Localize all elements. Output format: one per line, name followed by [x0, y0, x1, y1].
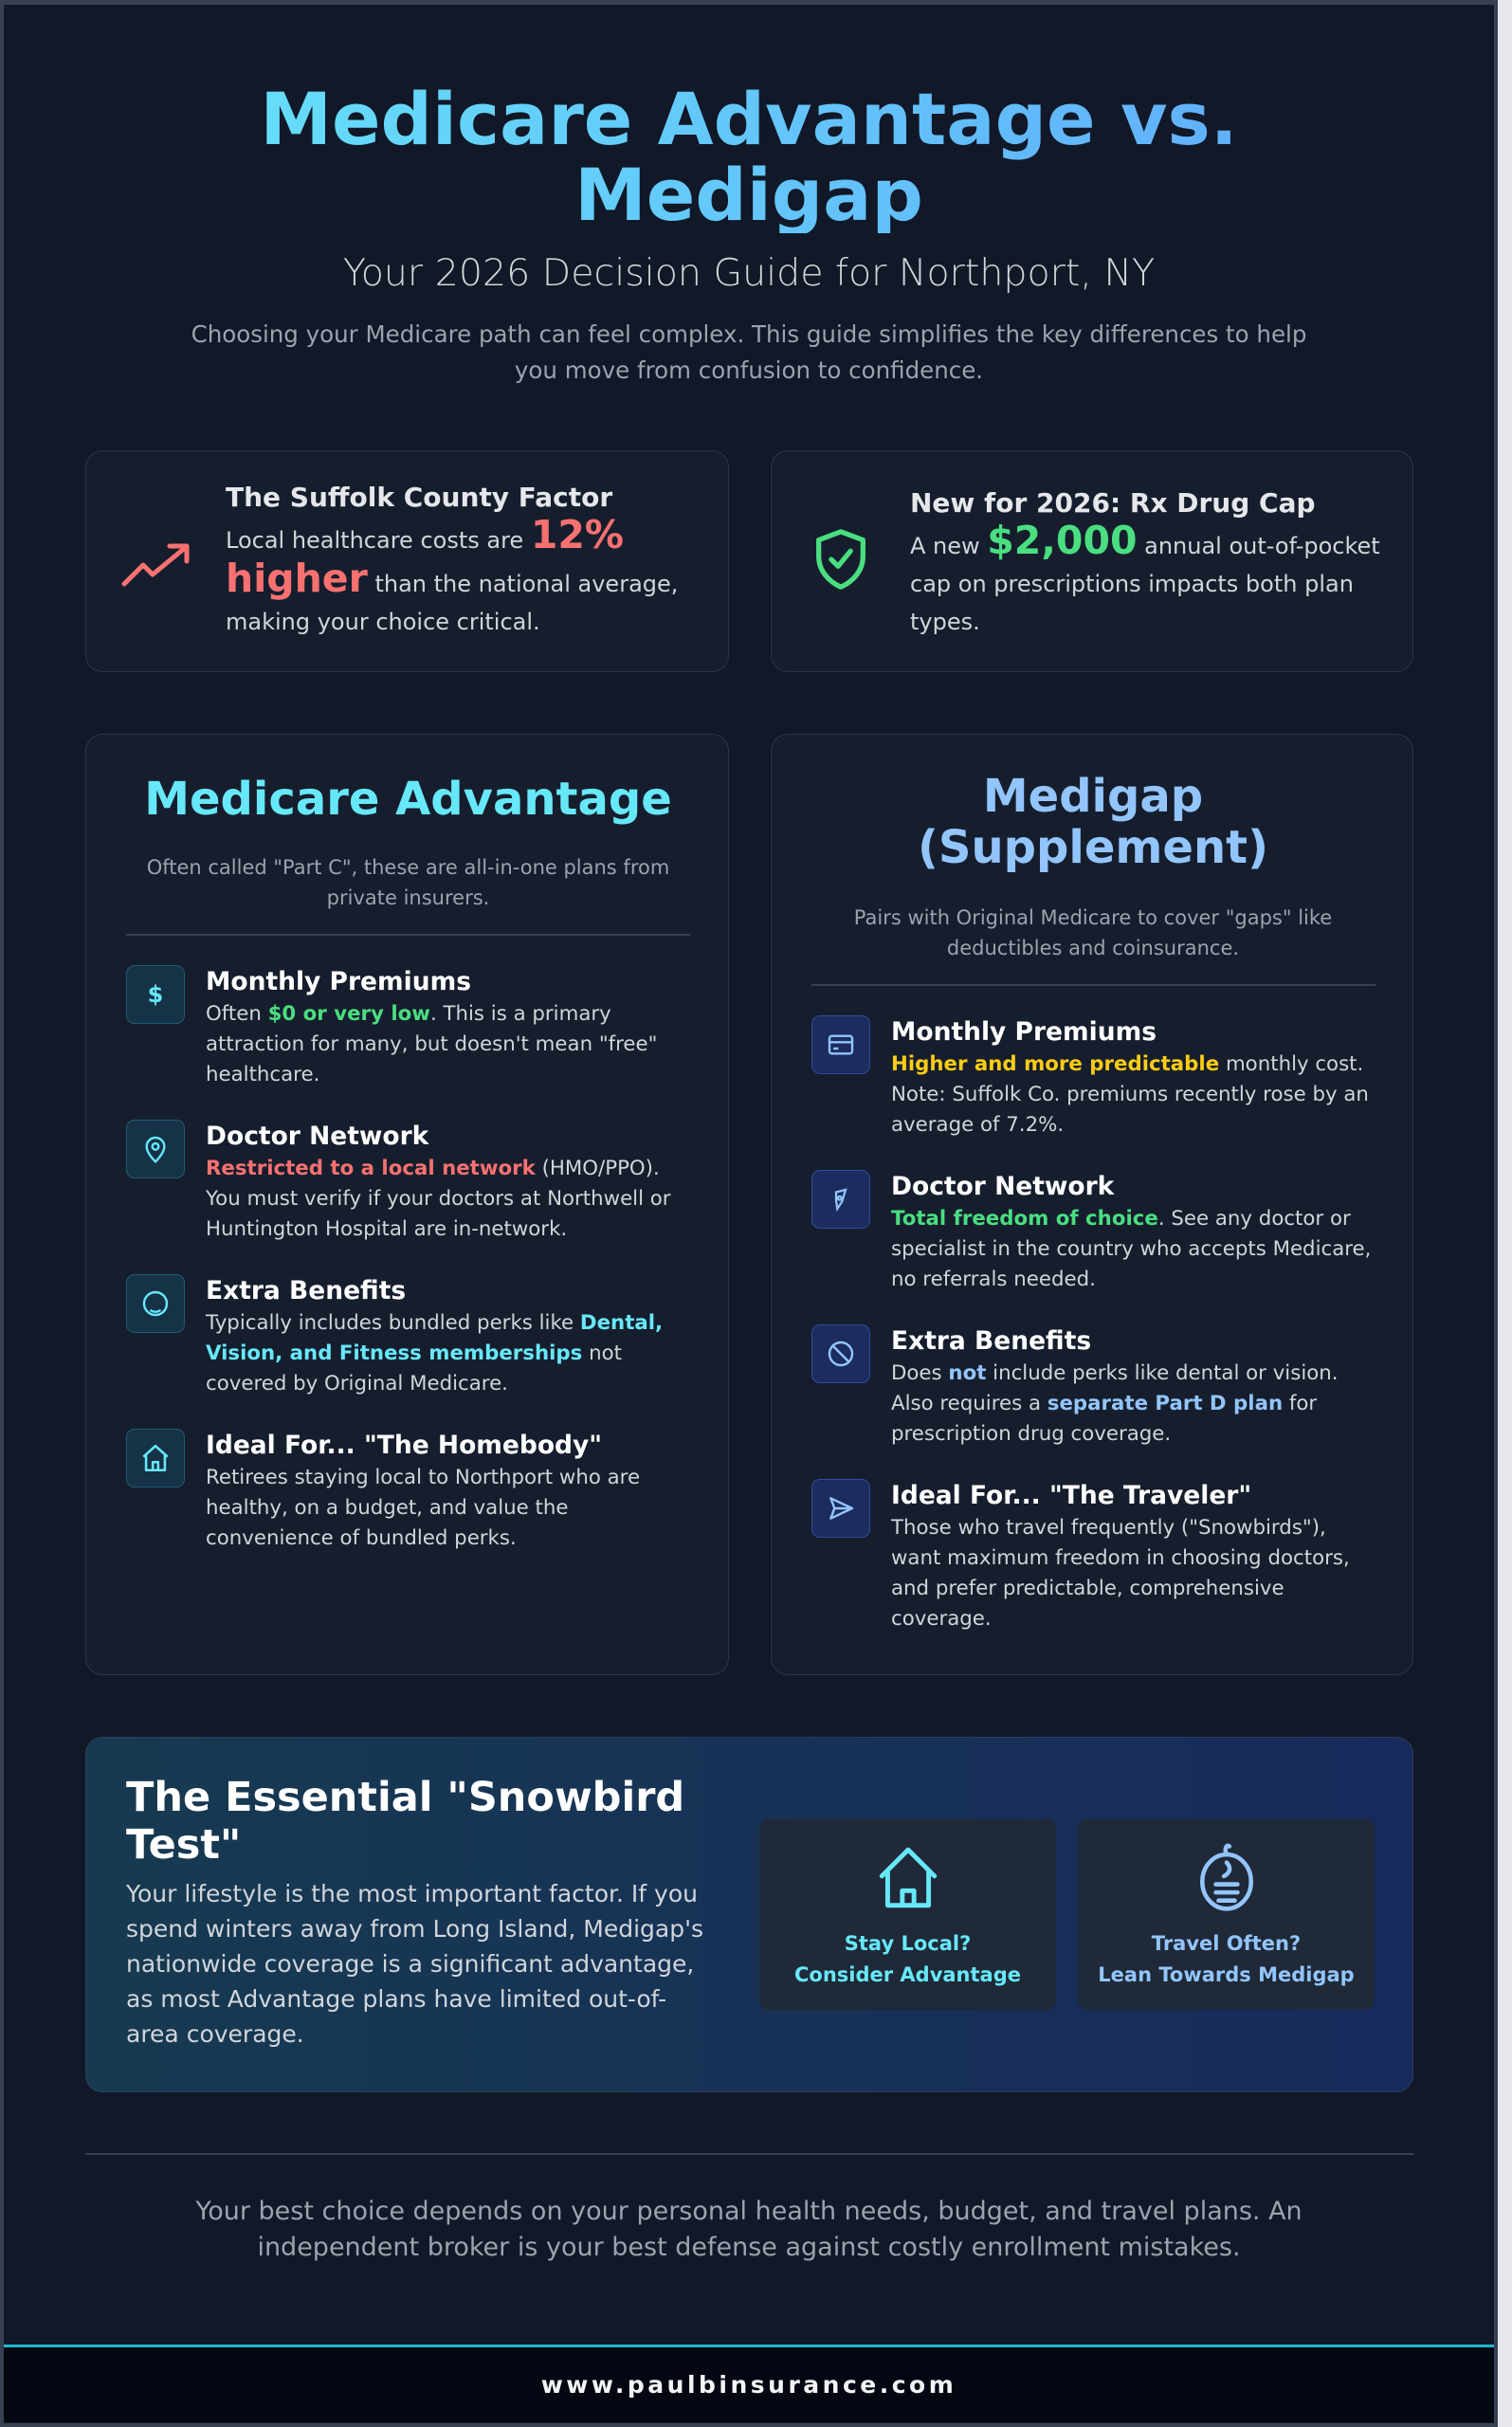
option card: stay local: Stay Local?: [845, 1932, 971, 1955]
item: ideal for homebody: [126, 1429, 640, 1550]
option card: travel often: [1078, 1819, 1375, 2010]
item: extra benefits: Typically includes bundled perks like Dental, Vision, and Fitness memberships not covered by Original Medicare.: [206, 1311, 663, 1396]
footer: [4, 2345, 1494, 2422]
icon: trend up: [121, 544, 190, 586]
snowbird heading: The Essential "Snowbird Test": [126, 1774, 684, 1869]
title: [0, 82, 1498, 233]
option card: stay local: Consider Advantage: [794, 1963, 1021, 1986]
item: monthly premiums: Monthly Premiums: [891, 1017, 1157, 1047]
panel heading: [918, 770, 1268, 874]
icon: shield check: [816, 529, 865, 590]
item: doctor network: [126, 1120, 671, 1241]
item: doctor network: [811, 1170, 1371, 1291]
panel description: Often called "Part C", these are all-in-one plans from private insurers.: [147, 856, 669, 909]
item: ideal for homebody: Retirees staying local to Northport who are healthy, on a budget, and value the convenience of bundled perks.: [206, 1466, 640, 1550]
panel description: Pairs with Original Medicare to cover "gaps" like deductibles and coinsurance.: [854, 906, 1332, 959]
stat text: The Suffolk County Factor: [226, 482, 612, 513]
stat card: Rx cap: [771, 450, 1413, 672]
item: ideal for traveler: [811, 1479, 1350, 1631]
item: doctor network: Restricted to a local network (HMO/PPO). You must verify if your doctors at Northwell or Huntington Hospital are in-network.: [206, 1157, 671, 1241]
panel heading: Medicare Advantage: [144, 773, 672, 826]
item: extra benefits: [811, 1324, 1339, 1446]
icon: dollar: [126, 965, 185, 1024]
item: monthly premiums: Monthly Premiums: [206, 967, 471, 996]
snowbird body: Your lifestyle is the most important factor. If you spend winters away from Long Island, Medigap's nationwide coverage is a significant advantage, as most Advantage plans have limited out-of-area coverage.: [126, 1880, 703, 2048]
panel: Medigap: [771, 734, 1413, 1675]
icon: compass: [811, 1170, 870, 1229]
title: Medicare Advantage vs. Medigap: [260, 77, 1238, 237]
item: ideal for homebody: Ideal For... "The Homebody": [206, 1431, 602, 1460]
item: extra benefits: Does not include perks like dental or vision. Also requires a separate Part D plan for prescription drug coverage.: [891, 1361, 1339, 1446]
panel: snowbird test: [85, 1737, 1413, 2092]
item: ideal for traveler: Those who travel frequently ("Snowbirds"), want maximum freedom in choosing doctors, and prefer predictable, comprehensive coverage.: [891, 1516, 1350, 1631]
stat text: A new $2,000 annual out-of-pocket cap on prescriptions impacts both plan types.: [910, 518, 1380, 635]
item: monthly premiums: Higher and more predictable monthly cost. Note: Suffolk Co. premiums recently rose by an average of 7.2%.: [891, 1052, 1369, 1137]
stat text: New for 2026: Rx Drug Cap: [910, 487, 1316, 519]
icon: house: [126, 1429, 185, 1487]
item: doctor network: Total freedom of choice. See any doctor or specialist in the country who accepts Medicare, no referrals needed.: [891, 1207, 1371, 1291]
stat text: Local healthcare costs are 12% higher than the national average, making your choice critical.: [226, 512, 678, 635]
option card: travel often: Lean Towards Medigap: [1098, 1963, 1355, 1986]
item: doctor network: Doctor Network: [206, 1122, 428, 1151]
subtitle: Your 2026 Decision Guide for Northport, NY: [343, 251, 1155, 295]
item: monthly premiums: [126, 965, 657, 1086]
footer: www.paulbinsurance.com: [541, 2371, 956, 2399]
stat card: Suffolk County: [85, 450, 729, 672]
item: ideal for traveler: Ideal For... "The Traveler": [891, 1481, 1251, 1510]
item: doctor network: Doctor Network: [891, 1172, 1114, 1201]
option card: travel often: Travel Often?: [1152, 1932, 1301, 1955]
item: monthly premiums: Often $0 or very low. This is a primary attraction for many, but doesn't mean "free" healthcare.: [206, 1002, 657, 1086]
closing text: Your best choice depends on your personal health needs, budget, and travel plans. An independent broker is your best defense against costly enrollment mistakes.: [195, 2197, 1303, 2262]
item: monthly premiums: [811, 1015, 1369, 1137]
item: extra benefits: Extra Benefits: [891, 1326, 1091, 1356]
icon: ban: [811, 1324, 870, 1383]
item: extra benefits: [126, 1274, 663, 1396]
icon: card: [811, 1015, 870, 1074]
icon: map pin: [126, 1120, 185, 1178]
icon: house: [880, 1847, 937, 1907]
intro text: Choosing your Medicare path can feel complex. This guide simplifies the key differences to help you move from confusion to confidence.: [191, 320, 1306, 384]
icon: dollar: $: [148, 981, 163, 1008]
option card: stay local: [759, 1819, 1056, 2010]
panel: Medicare Advantage: [85, 734, 729, 1675]
panel heading: Medigap: [983, 770, 1203, 823]
panel heading: (Supplement): [918, 821, 1268, 874]
icon: smile: [126, 1274, 185, 1333]
item: extra benefits: Extra Benefits: [206, 1276, 406, 1305]
icon: globe: [1200, 1843, 1253, 1911]
icon: send: [811, 1479, 870, 1538]
